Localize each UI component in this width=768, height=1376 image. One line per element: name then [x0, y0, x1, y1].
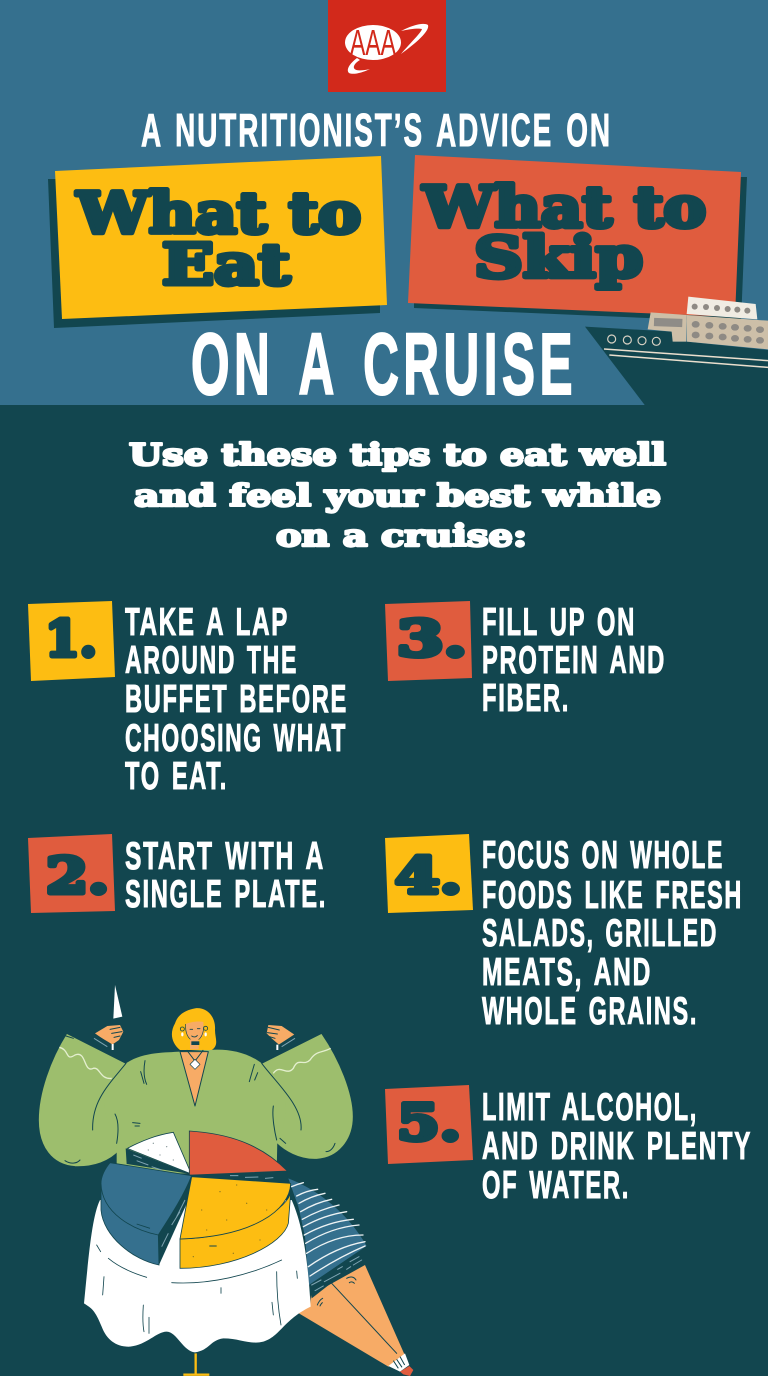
- tablecloth: [84, 1200, 311, 1352]
- number badge 3: 3.: [397, 609, 467, 668]
- tip 2: [28, 834, 327, 916]
- tip 3: [385, 601, 666, 720]
- slice: blue: [101, 1163, 192, 1265]
- number badge 3: [385, 601, 472, 681]
- panel: what to skip: Skip: [474, 225, 643, 291]
- tip 3 text: FIBER.: [482, 677, 570, 720]
- tip 3 text: [482, 601, 666, 720]
- tip 1: [28, 601, 348, 798]
- panel: what to eat: [48, 156, 387, 328]
- number badge 5: 5.: [397, 1093, 461, 1152]
- tip 2 text: [125, 835, 327, 916]
- tip 5 text: OF WATER.: [482, 1164, 630, 1207]
- tip 5 text: [482, 1086, 752, 1207]
- table stand: [183, 1353, 209, 1375]
- body: [105, 1050, 286, 1173]
- tip 1 text: TO EAT.: [125, 755, 228, 798]
- tip 2 text: SINGLE PLATE.: [125, 873, 327, 916]
- slice: red: [189, 1131, 289, 1182]
- panel: what to eat: Eat: [162, 232, 290, 298]
- number badge 2: 2.: [46, 846, 109, 905]
- panel: what to skip: What to: [422, 174, 706, 240]
- subheading: Use these tips to eat well: [129, 438, 666, 473]
- subheading: [129, 438, 666, 554]
- icon: cruise ship: [585, 297, 768, 405]
- slice: yellow: [180, 1177, 291, 1268]
- tip 1 text: TAKE A LAP: [125, 601, 289, 644]
- tip 1 text: CHOOSING WHAT: [125, 717, 347, 760]
- tip 4 text: [482, 834, 743, 1033]
- tip 2 text: START WITH A: [125, 835, 325, 878]
- tip 1 text: [125, 601, 348, 798]
- hands and knife: [90, 985, 300, 1051]
- number badge 5: [385, 1085, 473, 1164]
- tip 1 text: AROUND THE: [125, 639, 298, 682]
- tip 5: [385, 1085, 752, 1207]
- tip 1 text: BUFFET BEFORE: [125, 678, 348, 721]
- slice: white: [126, 1132, 191, 1174]
- icon: AAA logo: AAA: [350, 22, 396, 63]
- panel: what to eat: What to: [76, 180, 361, 246]
- subheading: on a cruise:: [276, 519, 527, 554]
- woman head and neckline: [172, 1008, 216, 1106]
- tip 3 text: FILL UP ON: [482, 601, 636, 644]
- panel: header background: [0, 0, 768, 405]
- tip 4: [385, 834, 743, 1033]
- left sleeve: [38, 1033, 126, 1167]
- number badge 1: 1.: [45, 609, 97, 668]
- illustration: woman at table with pie chart: [38, 985, 413, 1376]
- pie chart: [101, 1131, 291, 1268]
- number badge 4: 4.: [395, 846, 462, 905]
- icon: AAA logo: [328, 0, 446, 92]
- right sleeve: [262, 1033, 353, 1159]
- number badge 4: [385, 834, 473, 913]
- panel: tips background: [0, 405, 768, 1376]
- number badge 2: [28, 834, 115, 913]
- subheading: and feel your best while: [134, 479, 661, 514]
- number badge 1: [28, 601, 115, 681]
- skirt: [288, 1178, 367, 1298]
- panel: what to skip: [408, 155, 747, 322]
- leg: [298, 1265, 413, 1376]
- garment lines: [59, 1036, 335, 1163]
- tip 4 text: MEATS, AND: [482, 951, 652, 994]
